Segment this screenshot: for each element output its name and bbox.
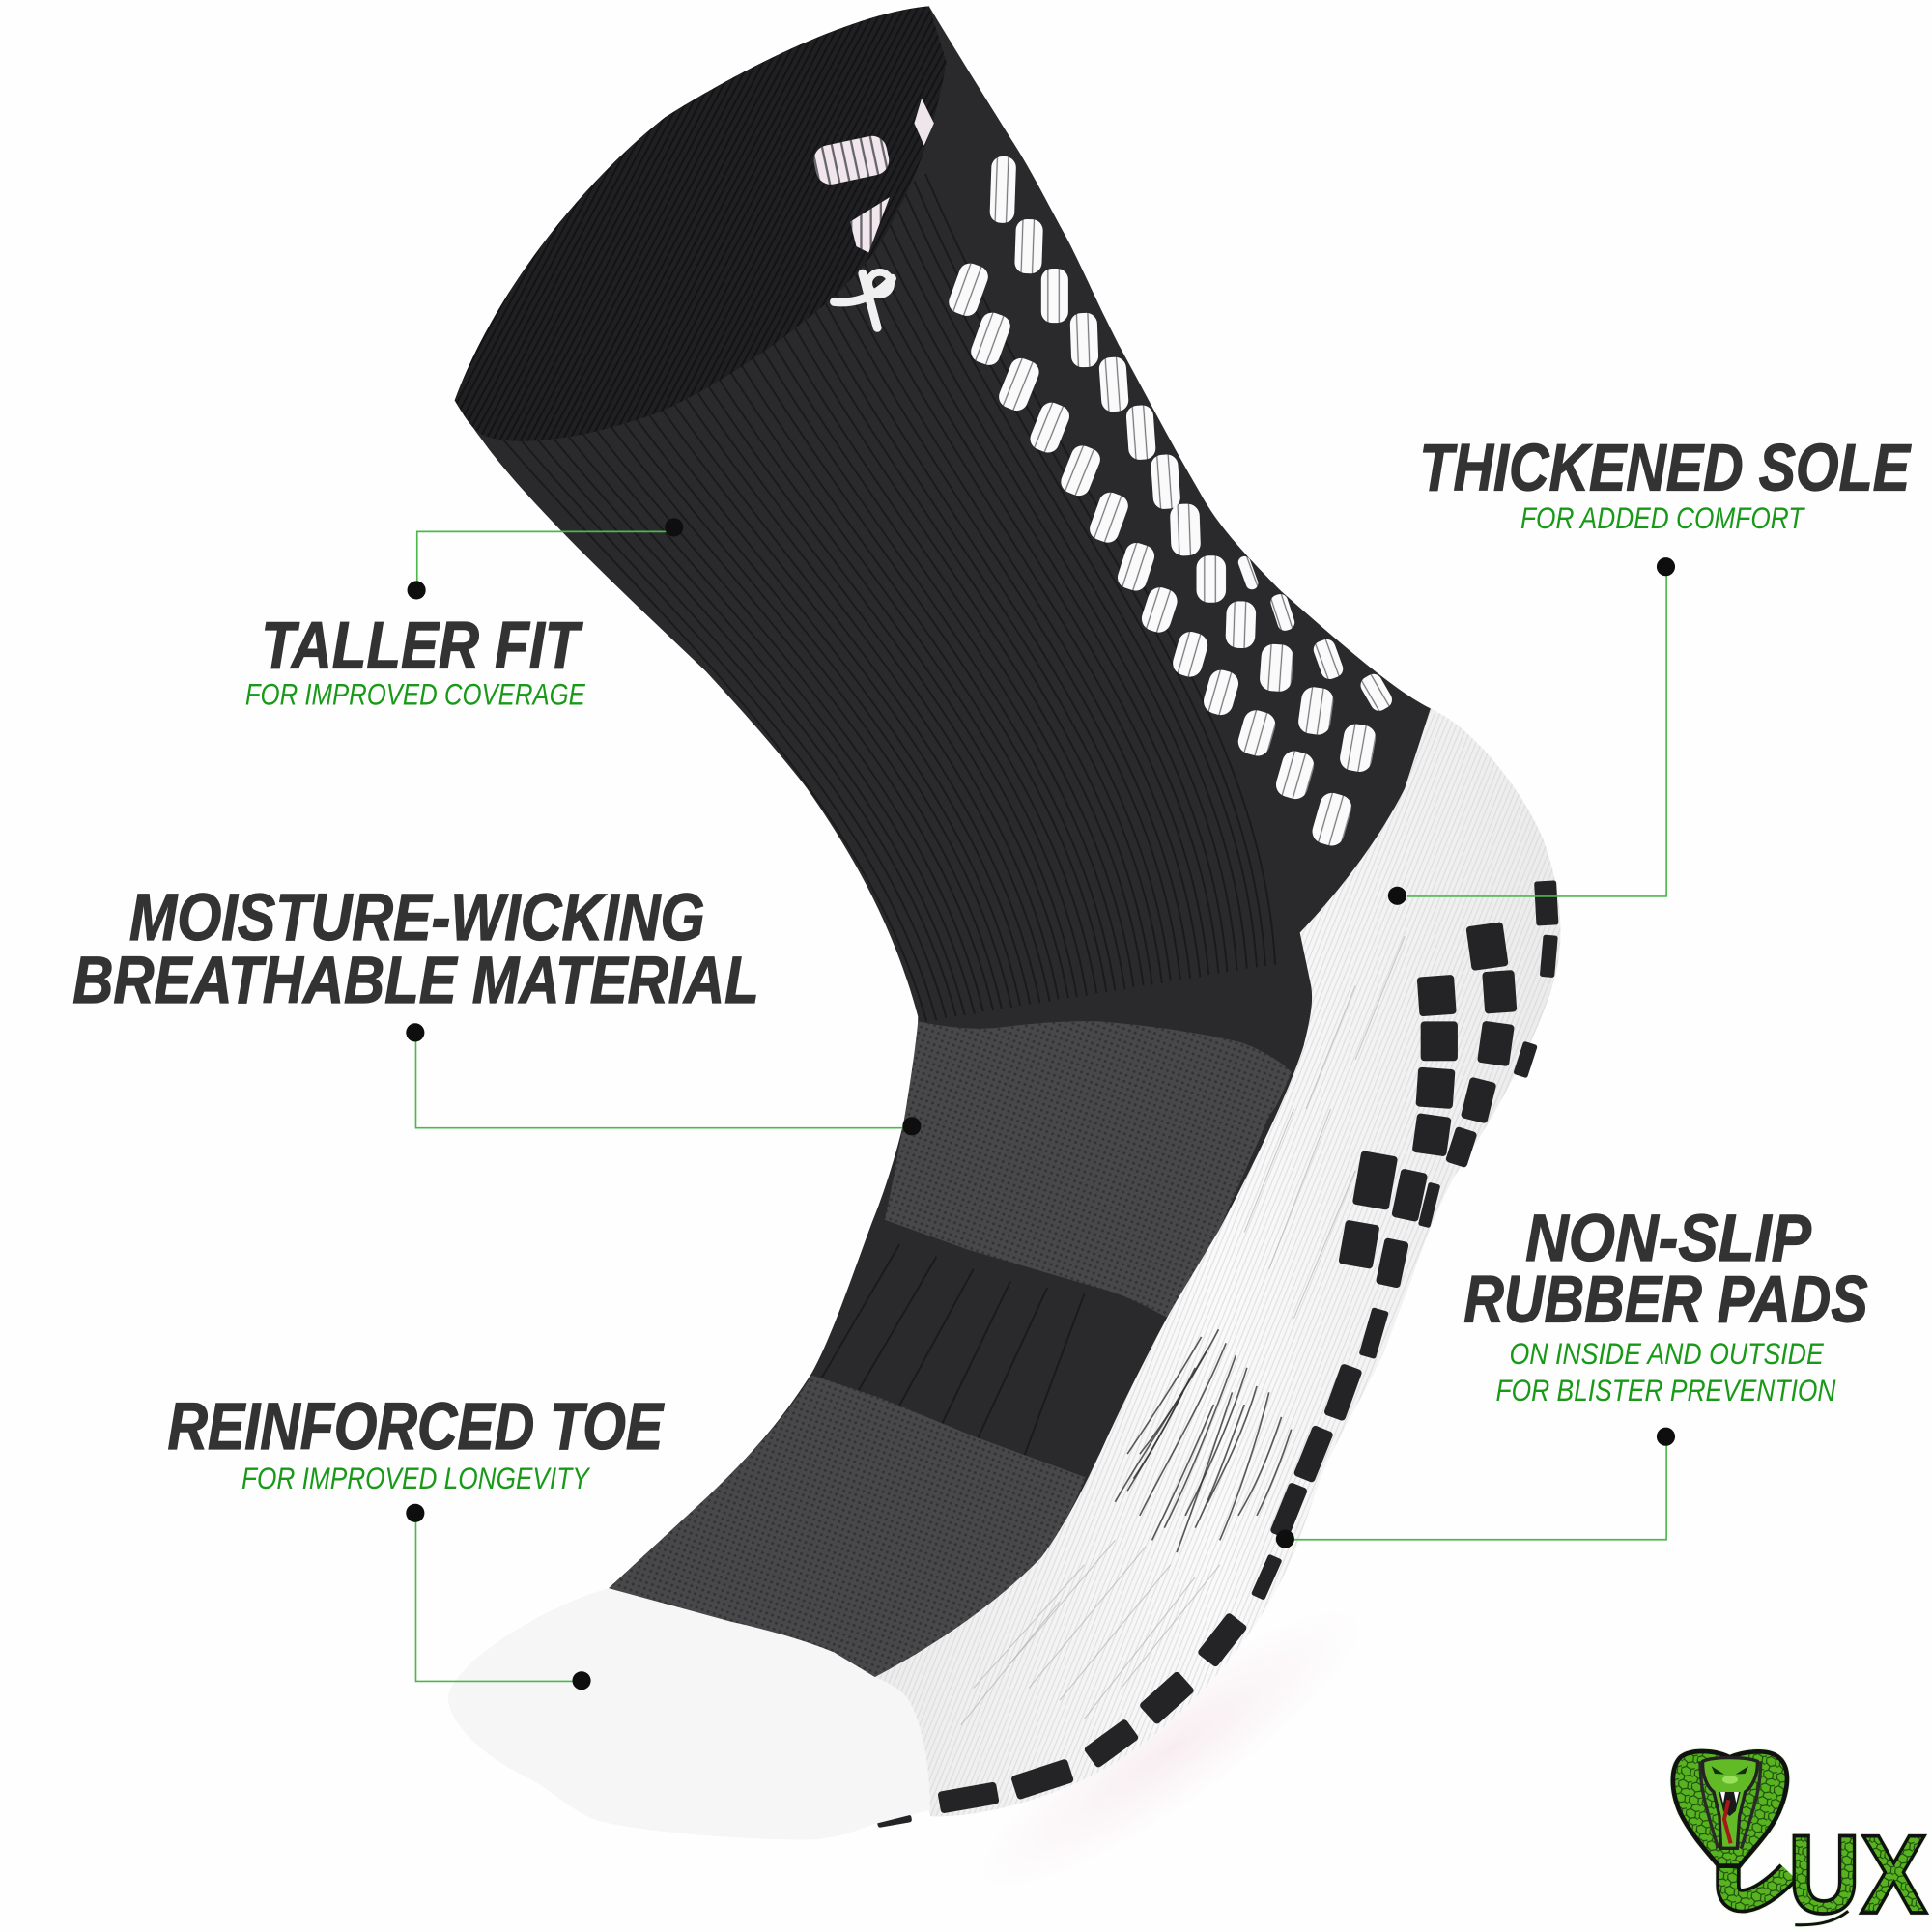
callout: taller fit — [245, 518, 683, 712]
hood inner ridges — [1700, 1761, 1761, 1848]
subheading: FOR IMPROVED COVERAGE — [245, 677, 585, 712]
sock illustration — [448, 6, 1560, 1839]
callout: thickened sole — [1388, 431, 1912, 905]
leader dot top — [1657, 1428, 1675, 1446]
leader line — [1293, 1444, 1666, 1540]
sole fine lines — [961, 936, 1405, 1725]
heading line one: NON-SLIP — [1525, 1201, 1812, 1275]
leader line — [1407, 574, 1666, 896]
sock brand mark — [835, 272, 892, 327]
leader dot on sock — [1276, 1530, 1294, 1548]
snake body forming letter L — [1728, 1858, 1789, 1901]
inner grip showing through cuff — [811, 99, 934, 252]
leader line — [417, 531, 667, 582]
floor shadow — [947, 1570, 1394, 1929]
rubber pads on sole — [877, 880, 1558, 1828]
sole thread streaks — [1115, 1329, 1292, 1552]
white reinforced toe — [448, 1588, 930, 1839]
arch mesh panel — [885, 1021, 1292, 1318]
forefoot mesh panel — [609, 1375, 1086, 1677]
leader dot on sock — [665, 518, 683, 536]
cobra head — [1703, 1758, 1757, 1848]
open mouth — [1719, 1792, 1741, 1816]
subheading: FOR ADDED COMFORT — [1520, 500, 1805, 535]
heading: TALLER FIT — [261, 608, 583, 682]
subheading line one: ON INSIDE AND OUTSIDE — [1509, 1336, 1824, 1371]
heading: REINFORCED TOE — [167, 1389, 665, 1463]
leg ribbing — [500, 174, 1275, 1460]
leader line — [415, 1520, 574, 1681]
fangs — [1720, 1792, 1739, 1804]
forked tongue — [1724, 1800, 1731, 1843]
callout: reinforced toe — [167, 1389, 665, 1690]
sole knit texture — [875, 708, 1560, 1816]
heading line two: BREATHABLE MATERIAL — [72, 943, 759, 1017]
leader dot on sock — [572, 1671, 591, 1690]
leader dot on sock — [902, 1117, 921, 1135]
grip dots on leg — [946, 156, 1395, 849]
sole and heel in white — [875, 708, 1560, 1816]
black knit leg — [455, 6, 1431, 1677]
leader dot top — [406, 1504, 424, 1522]
leader dot on sock — [1388, 887, 1406, 905]
leader dot top — [408, 581, 426, 600]
leader dot top — [1657, 557, 1675, 576]
subheading line two: FOR BLISTER PREVENTION — [1495, 1373, 1836, 1407]
callout: moisture-wicking — [72, 880, 921, 1135]
snake eyes — [1712, 1766, 1748, 1775]
logo: cobra LUX — [1673, 1751, 1927, 1932]
cobra hood — [1673, 1751, 1787, 1866]
inner cuff opening — [455, 6, 947, 441]
callout: non-slip rubber pads — [1276, 1201, 1868, 1548]
snout — [1722, 1776, 1738, 1784]
heading line one: MOISTURE-WICKING — [129, 880, 705, 954]
subheading: FOR IMPROVED LONGEVITY — [242, 1461, 591, 1495]
snake tail — [1795, 1911, 1848, 1925]
leader dot top — [406, 1023, 424, 1041]
leader line — [415, 1040, 903, 1128]
